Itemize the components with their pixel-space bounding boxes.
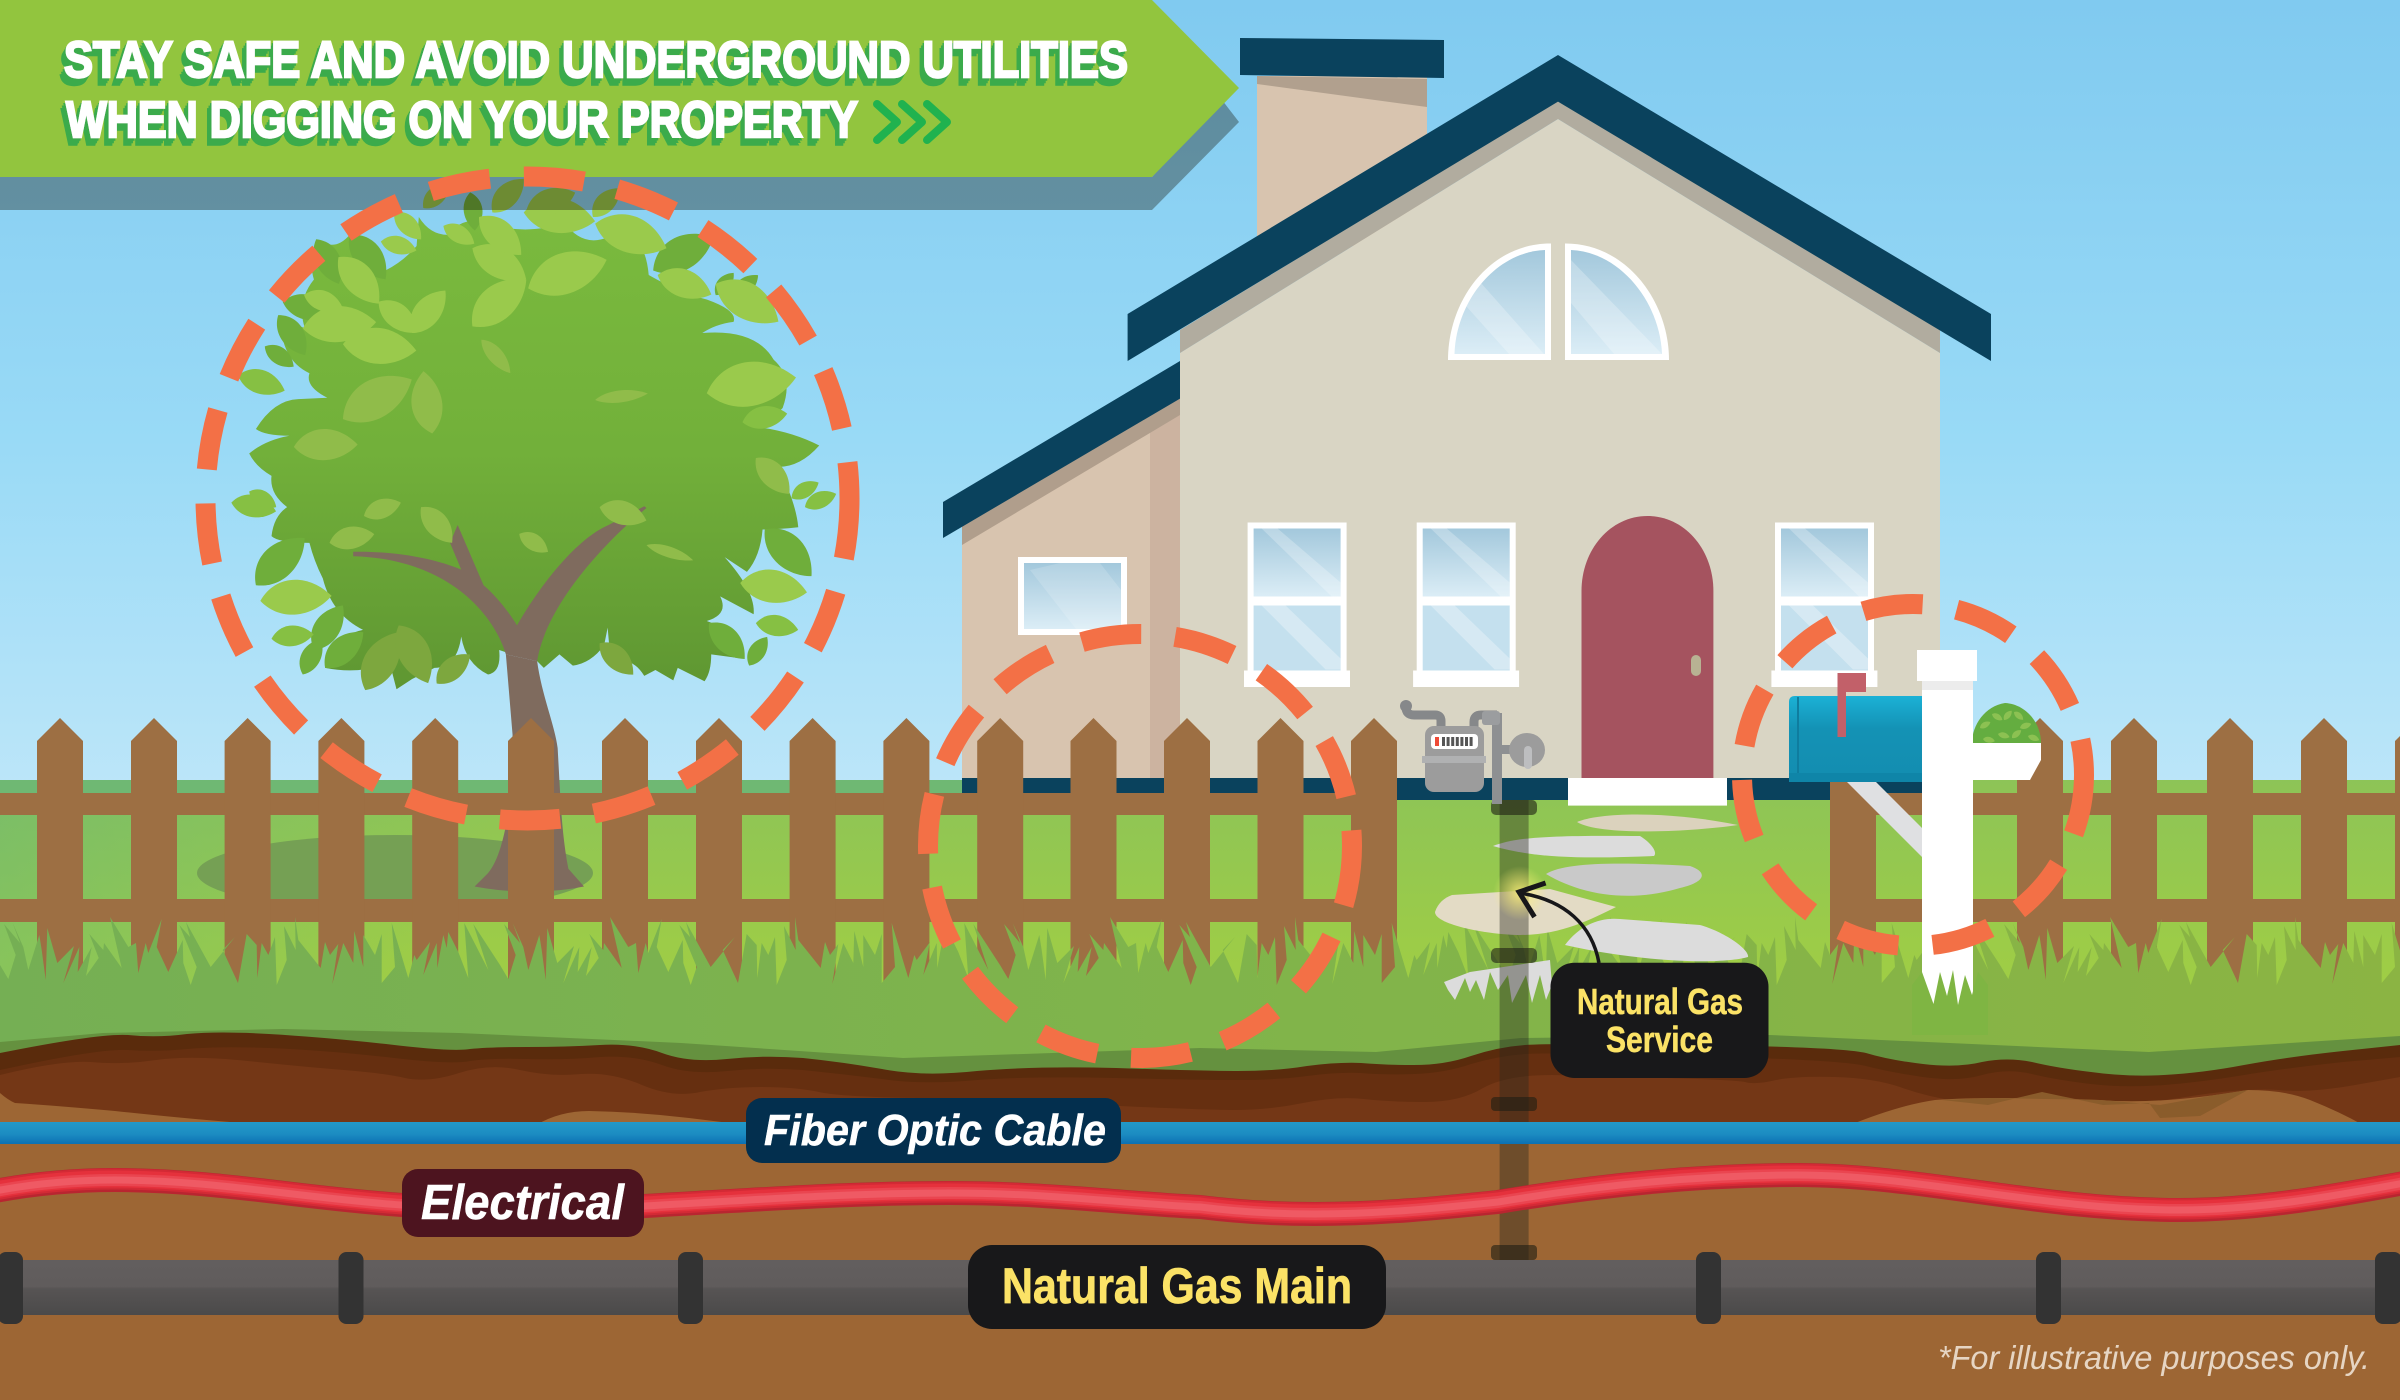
planter shelf: [1973, 743, 2041, 780]
natural gas service pipe: [1491, 800, 1537, 1260]
mailbox brace: [1847, 782, 1922, 857]
window: [1244, 522, 1350, 687]
light leaves: [259, 171, 809, 617]
sky background: [0, 0, 2400, 800]
chimney: [1240, 38, 1444, 246]
label: natural gas service: [1550, 963, 1768, 1078]
label: natural gas main: [968, 1245, 1386, 1329]
branches over foliage: [353, 506, 646, 661]
foliage mass: [249, 217, 819, 689]
label: natural gas main: Natural Gas Main: [1002, 1258, 1352, 1314]
planter bush: [1972, 703, 2041, 744]
natural gas main: [0, 1252, 2400, 1324]
lawn behind fence: [0, 780, 2400, 1010]
stepping stones: [1435, 814, 1748, 1003]
disclaimer note: *For illustrative purposes only.: [1938, 1339, 2370, 1376]
mailbox flag: [1838, 673, 1866, 737]
mailbox post and planter: [1789, 650, 2041, 1035]
post grass base: [1912, 970, 1988, 1035]
label: electrical: Electrical: [421, 1176, 625, 1230]
fence rails: [0, 793, 2400, 922]
title text: STAY SAFE AND AVOID UNDERGROUND UTILITIES: [64, 31, 1128, 88]
title text: [64, 31, 1128, 148]
soil layers: [0, 1029, 2400, 1125]
dashed circle: tree: [206, 176, 850, 820]
foundation: [962, 778, 1940, 800]
title banner: [0, 0, 1239, 177]
dashed circle: lawn: [928, 634, 1352, 1058]
gas meter: [1400, 700, 1545, 804]
mailbox: [1789, 696, 1923, 782]
label: fiber optic cable: Fiber Optic Cable: [764, 1106, 1106, 1155]
wooden fence: [0, 718, 2400, 990]
door: [1568, 516, 1727, 806]
front grass: [0, 917, 2400, 1058]
trunk and branches: [475, 654, 584, 892]
title text: WHEN DIGGING ON YOUR PROPERTY: [66, 91, 858, 148]
main wall: [1180, 119, 1940, 778]
lighter soil mounds: [0, 1090, 2363, 1125]
arched window: [1448, 243, 1669, 360]
side wing: [943, 361, 1180, 778]
banner shadow: [0, 100, 1239, 210]
fiber optic cable: [0, 1122, 2400, 1144]
lower leaves: [350, 618, 641, 698]
roof shadow: [1180, 100, 1940, 353]
house: [943, 38, 1991, 806]
label: natural gas service: Service: [1606, 1019, 1713, 1060]
window: [1413, 522, 1519, 687]
window: [1771, 522, 1877, 687]
electrical line: [0, 1174, 2400, 1214]
underground base: [0, 1122, 2400, 1400]
muted leaves: [293, 334, 799, 565]
tree shadow: [197, 835, 593, 911]
side window: [1018, 557, 1127, 635]
label: natural gas service: Natural Gas: [1577, 981, 1743, 1022]
dashed circle: mailbox: [1742, 604, 2084, 946]
main roof: [1128, 55, 1991, 361]
small outer leaves: [229, 363, 839, 648]
grass shadow: [0, 1029, 2400, 1110]
fence pickets: [37, 718, 2400, 990]
tree: [229, 171, 839, 892]
dark outer leaves: [244, 191, 824, 679]
mailbox post: [1917, 650, 1977, 1016]
chevrons: [877, 104, 947, 140]
arrow to gas service: [1493, 866, 1599, 963]
